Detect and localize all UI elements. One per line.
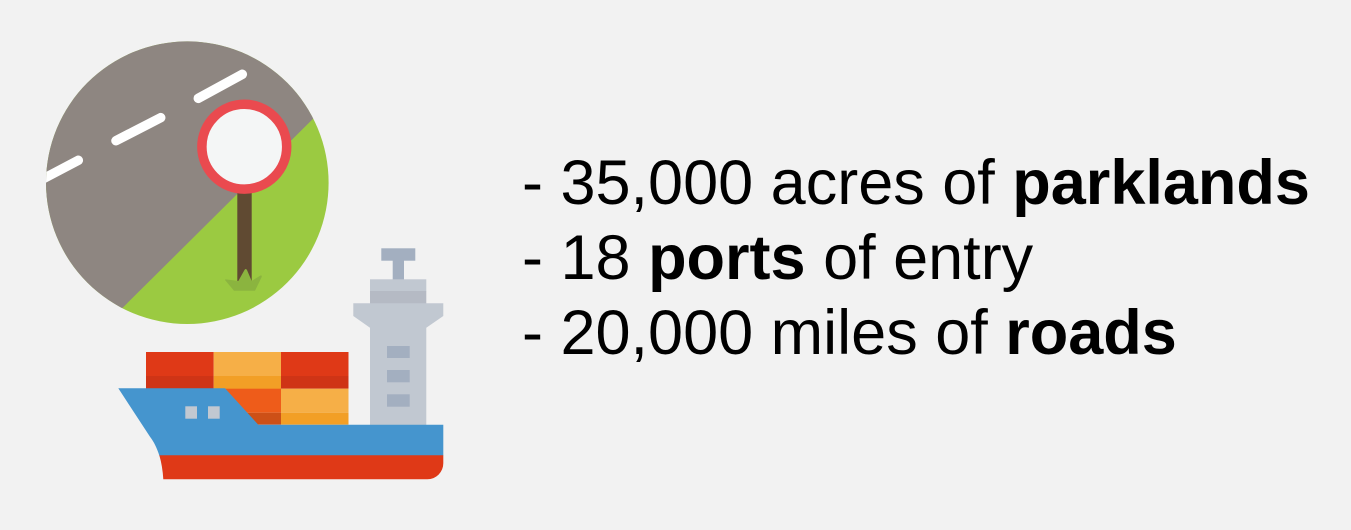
road lane dashes	[46, 70, 248, 182]
text block: statistics	[522, 148, 1310, 368]
hull windows	[185, 406, 197, 419]
sign post	[237, 190, 252, 282]
icon: container ship	[118, 248, 443, 479]
grass tuft	[225, 269, 262, 291]
red keel	[159, 455, 443, 479]
road surface	[46, 41, 313, 308]
sign face	[202, 104, 287, 189]
stat: ports: - 18 ports of entry	[522, 223, 1034, 293]
blue hull	[118, 388, 443, 456]
stat: parklands: - 35,000 acres of parklands	[522, 148, 1310, 218]
infographic canvas	[46, 41, 1308, 480]
icon: road sign in circle	[46, 41, 329, 324]
bridge tower	[353, 248, 443, 426]
stat: roads: - 20,000 miles of roads	[522, 298, 1177, 368]
containers	[146, 352, 348, 425]
